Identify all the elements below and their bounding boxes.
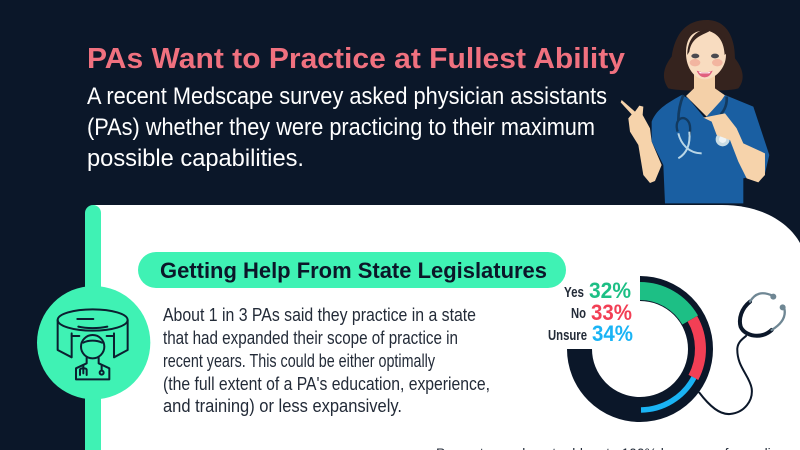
chart labels: No bbox=[571, 305, 586, 322]
chart labels: Yes bbox=[564, 284, 584, 301]
icon: physician in scope circle bbox=[37, 286, 150, 399]
segment: unsure bbox=[641, 378, 694, 410]
intro text bbox=[87, 83, 607, 172]
body text: and training) or less expansively. bbox=[163, 395, 402, 416]
accent bar bbox=[85, 205, 101, 450]
body text: (the full extent of a PA's education, experience, bbox=[163, 373, 490, 394]
body text: that had expanded their scope of practice in bbox=[163, 327, 458, 348]
chart labels bbox=[548, 278, 633, 346]
stethoscope bbox=[699, 293, 786, 414]
track bbox=[580, 288, 700, 409]
segment: yes bbox=[640, 291, 690, 320]
title: PAs Want to Practice at Fullest Ability bbox=[87, 43, 625, 75]
heading pill: Getting Help From State Legislatures bbox=[160, 258, 547, 283]
donut chart bbox=[580, 288, 700, 410]
intro text: (PAs) whether they were practicing to their maximum bbox=[87, 114, 595, 141]
chart labels: Unsure bbox=[548, 327, 587, 344]
chart labels: 34% bbox=[592, 321, 633, 346]
chart labels: 32% bbox=[589, 278, 631, 303]
body text bbox=[163, 304, 490, 416]
intro text: possible capabilities. bbox=[87, 145, 304, 172]
intro text: A recent Medscape survey asked physician assistants bbox=[87, 83, 607, 110]
white content panel bbox=[93, 205, 800, 450]
illustration: nurse bbox=[621, 20, 769, 203]
body text: recent years. This could be either optimally bbox=[163, 350, 436, 371]
body text: About 1 in 3 PAs said they practice in a state bbox=[163, 304, 476, 325]
chart labels: 33% bbox=[591, 300, 632, 325]
segment: no bbox=[692, 319, 700, 377]
heading pill bbox=[138, 252, 566, 288]
